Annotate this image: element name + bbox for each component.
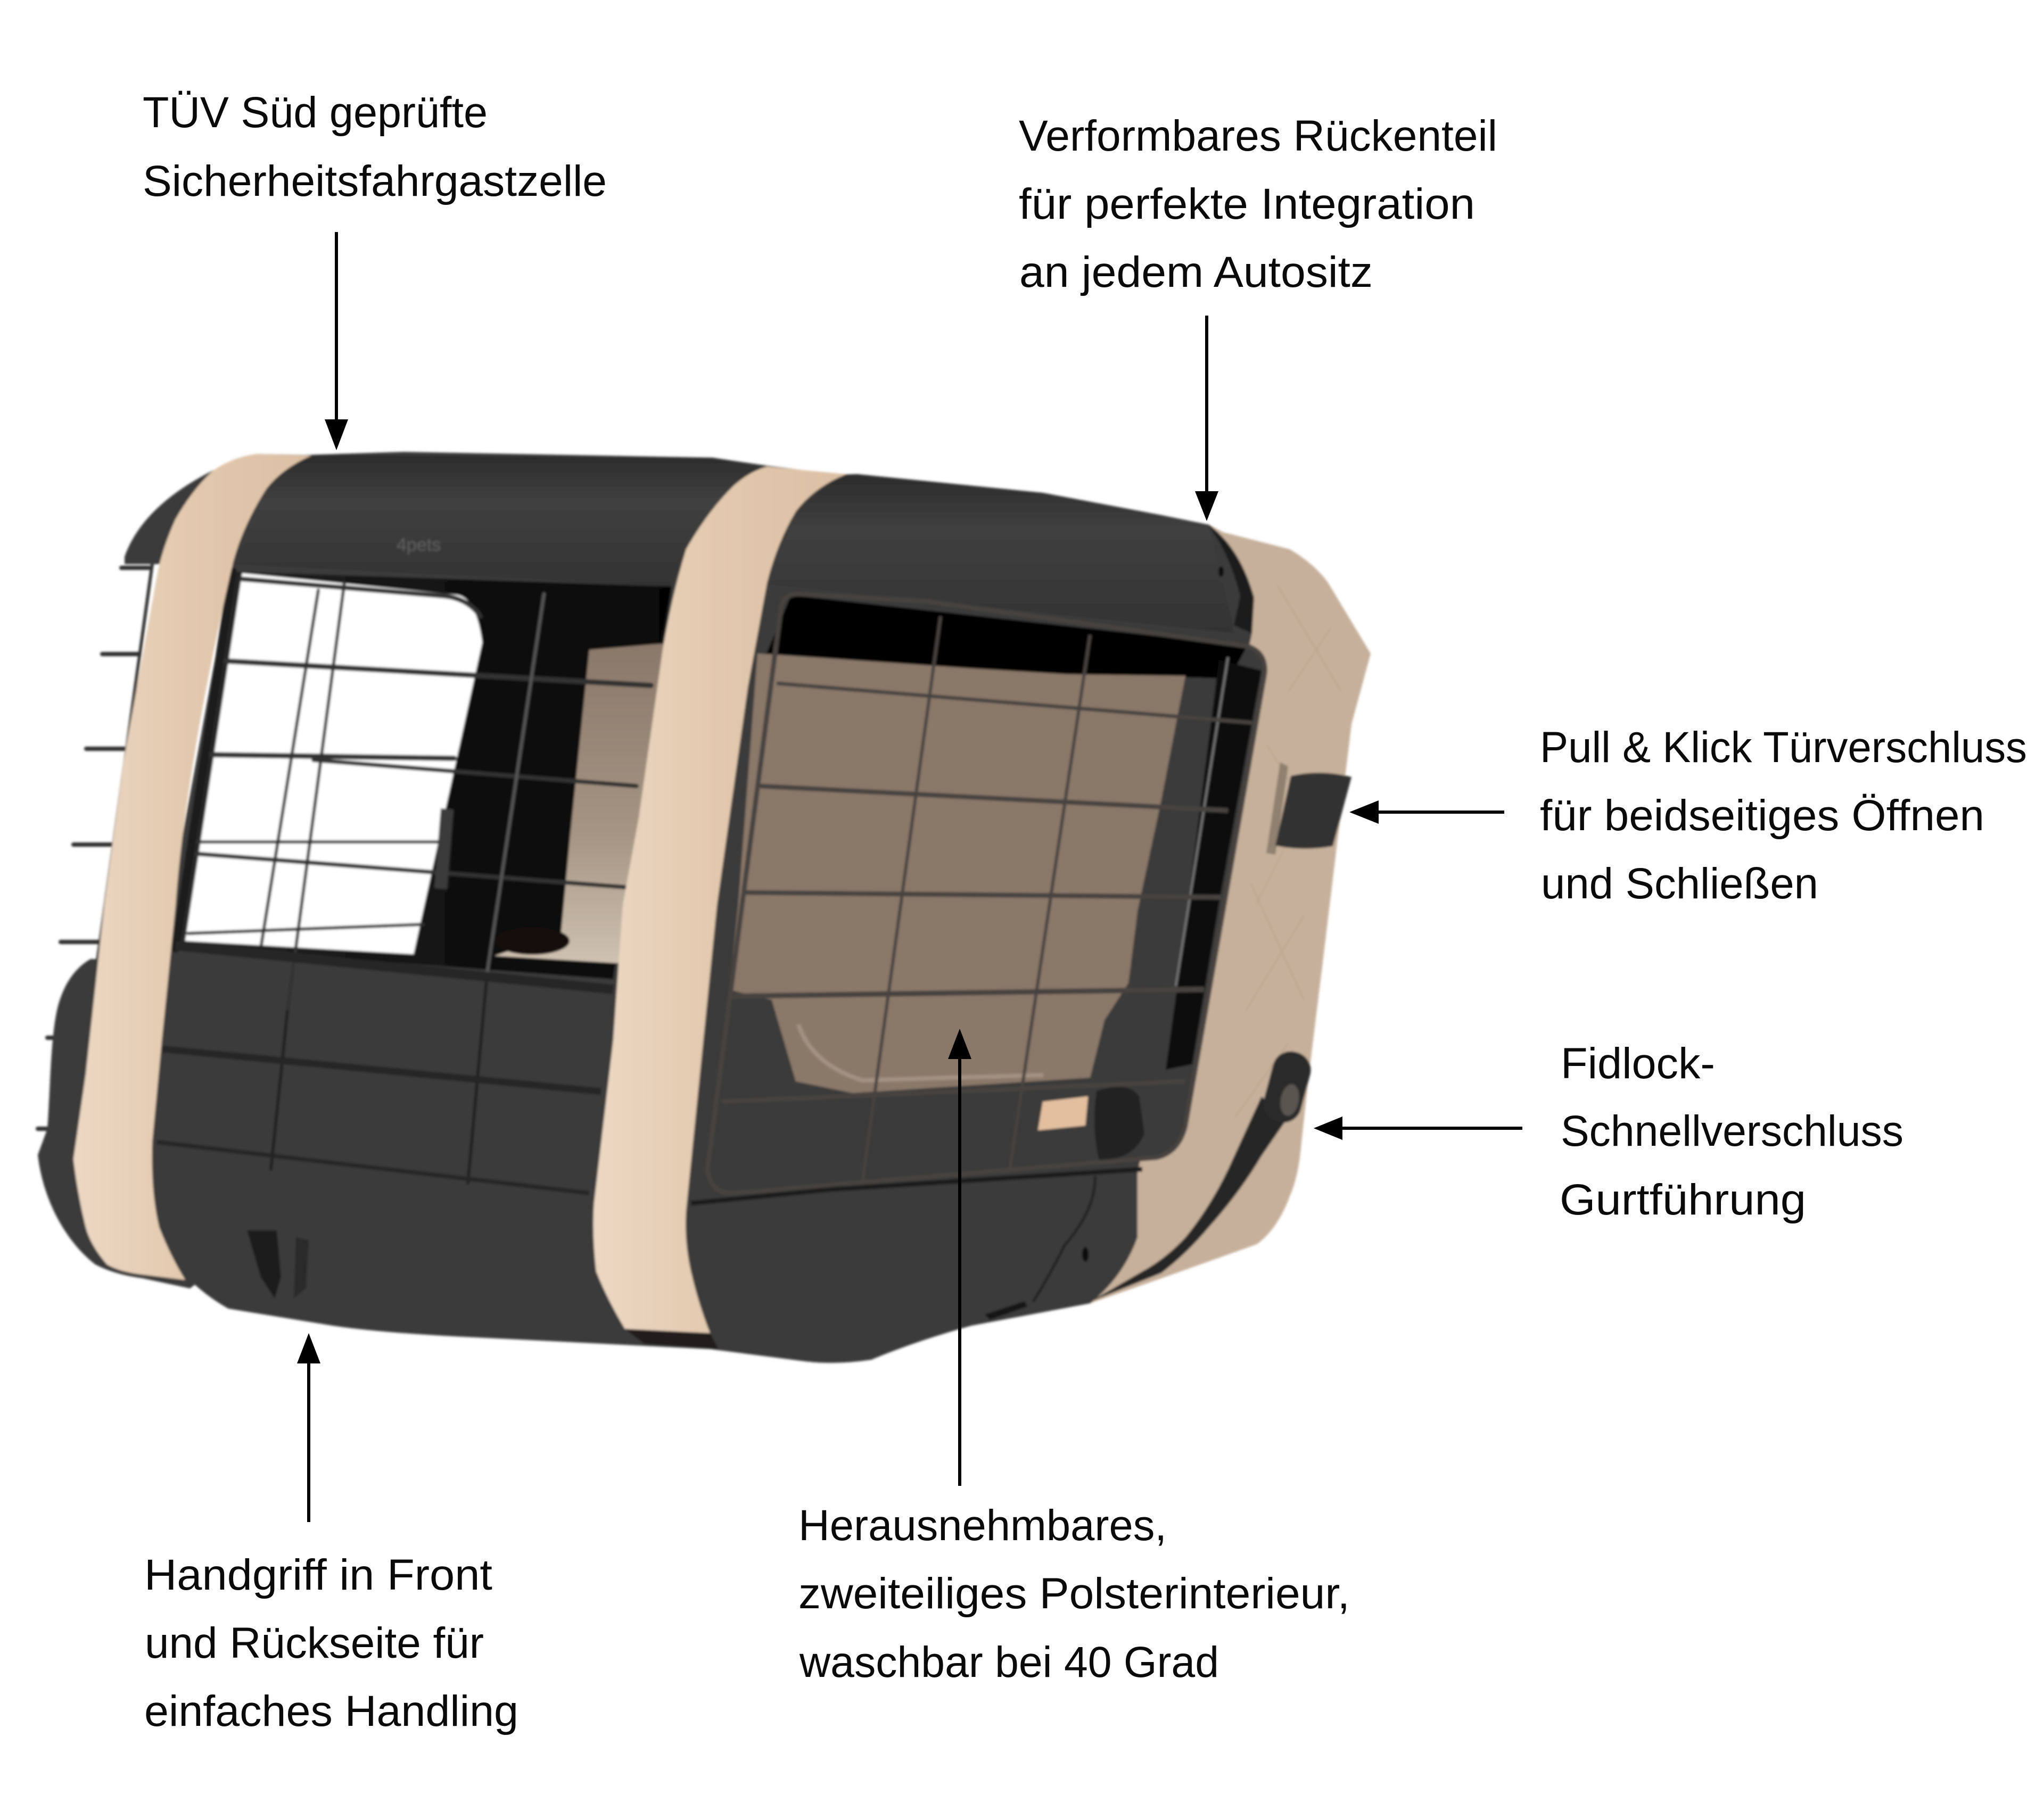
arrow: handle	[297, 1333, 320, 1522]
side strip wire	[1176, 657, 1228, 986]
cushion highlight	[798, 1024, 1043, 1080]
text: fidlock	[1560, 1039, 1903, 1224]
lower left panel rails	[157, 946, 613, 1193]
text: door lock	[1540, 723, 2027, 908]
text: handle	[144, 1551, 518, 1735]
text: door lock: Pull & Klick Türverschluss	[1540, 723, 2027, 772]
text: handle: Handgriff in Front	[144, 1551, 492, 1599]
arrow: fidlock buckle	[1314, 1117, 1522, 1140]
right door wire grid	[707, 594, 1265, 1193]
beige band left	[73, 454, 311, 1280]
pull and click door latch	[1266, 762, 1351, 855]
text: upholstery: waschbar bei 40 Grad	[799, 1638, 1219, 1686]
text: door lock: für beidseitiges Öffnen	[1540, 791, 1984, 840]
dark shell	[38, 452, 1254, 1363]
text: deformable back: an jedem Autositz	[1019, 248, 1373, 296]
product tag	[1038, 1096, 1088, 1130]
text: deformable back	[1019, 112, 1497, 296]
left door wire grid	[176, 572, 651, 1183]
text: fidlock: Gurtführung	[1560, 1176, 1806, 1224]
see-through white window	[185, 573, 482, 954]
front handle recess	[247, 1230, 281, 1299]
arrow: safety cell	[325, 232, 348, 450]
text: upholstery: zweiteiliges Polsterinterieur,	[798, 1569, 1350, 1618]
text: fidlock: Fidlock-	[1561, 1039, 1715, 1088]
product illustration: car transport box	[38, 452, 1371, 1363]
side seam and hole	[1033, 1176, 1095, 1302]
right black strip	[1166, 660, 1262, 1070]
quilted beige back cover	[1086, 525, 1371, 1303]
text: upholstery	[798, 1501, 1350, 1686]
quilt seams	[1214, 585, 1341, 1213]
side edge of top shell	[1209, 525, 1254, 633]
text: deformable back: für perfekte Integration	[1019, 180, 1475, 228]
text: safety cell: Sicherheitsfahrgastzelle	[143, 157, 607, 205]
shadow beneath right band	[625, 1329, 719, 1349]
left cushion	[494, 644, 676, 964]
grommet	[1218, 566, 1224, 577]
black upper interior	[767, 595, 1247, 679]
text: safety cell: TÜV Süd geprüfte	[143, 88, 488, 137]
left wire spikes	[38, 564, 152, 1129]
text: safety cell	[143, 88, 607, 205]
logo mark: 4pets	[397, 535, 441, 555]
top shell shading	[233, 455, 767, 586]
text: upholstery: Herausnehmbares,	[798, 1501, 1167, 1550]
arrow: upholstery	[948, 1029, 971, 1486]
text: fidlock: Schnellverschluss	[1561, 1107, 1903, 1155]
fidlock strap	[1090, 1047, 1315, 1302]
text: handle: und Rückseite für	[145, 1619, 484, 1667]
text: deformable back: Verformbares Rückenteil	[1019, 112, 1497, 160]
beige band right	[594, 467, 846, 1333]
text: handle: einfaches Handling	[144, 1687, 518, 1735]
text: door lock: und Schließen	[1541, 859, 1818, 908]
right door opening	[707, 594, 1265, 1193]
left interior black	[176, 572, 672, 979]
arrow: door lock	[1349, 800, 1504, 824]
lower door corner shadow	[1094, 1087, 1144, 1160]
arrow: back part	[1195, 316, 1218, 521]
base seam	[691, 1169, 1142, 1203]
right cushion	[729, 654, 1185, 1093]
